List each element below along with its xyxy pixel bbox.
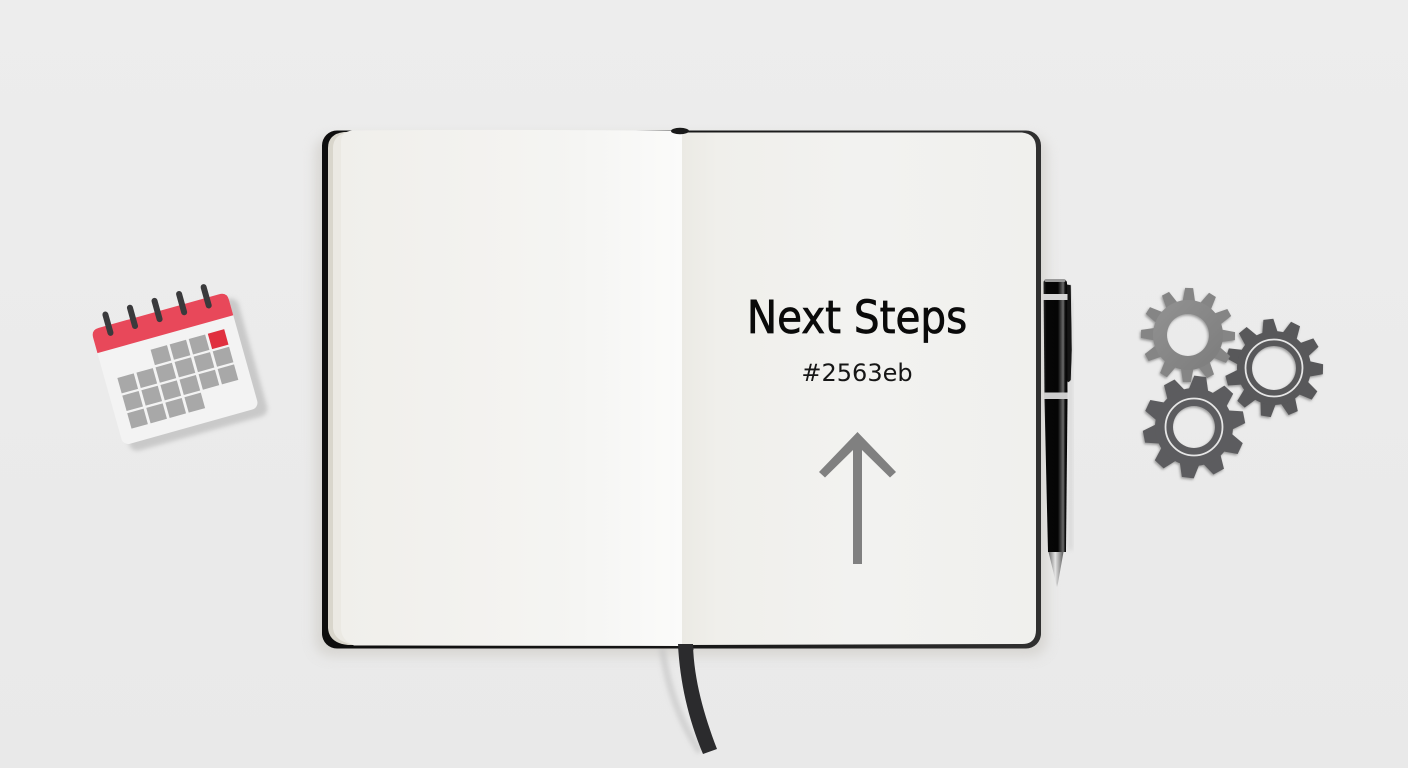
ribbon bookmark xyxy=(662,645,717,754)
ribbon top xyxy=(678,644,694,650)
pen xyxy=(1044,279,1073,587)
left page stack inner edge xyxy=(333,132,362,644)
subtitle colour code: #2563eb xyxy=(801,359,913,387)
spine clip xyxy=(671,128,689,134)
right page xyxy=(682,132,1036,645)
left page stack edges xyxy=(328,132,360,645)
icon: calendar xyxy=(88,279,269,454)
arrow: up xyxy=(819,432,896,564)
icon: gears xyxy=(1141,288,1323,479)
pen bands xyxy=(1044,294,1068,300)
calendar header xyxy=(91,292,233,353)
gear top xyxy=(1141,288,1235,382)
notebook shadow xyxy=(315,136,1047,656)
calendar page xyxy=(91,292,259,446)
pen cap top xyxy=(1044,279,1066,282)
title: Next Steps xyxy=(747,291,967,344)
notebook xyxy=(315,128,1047,754)
gear right xyxy=(1225,318,1323,418)
notebook cover xyxy=(322,130,1041,648)
pen tip xyxy=(1048,552,1064,587)
calendar date grid xyxy=(112,329,243,429)
pen clip xyxy=(1065,284,1072,382)
calendar shadow xyxy=(99,297,269,453)
calendar rings xyxy=(105,287,209,333)
pen shadow xyxy=(1068,300,1073,550)
pen barrel xyxy=(1044,279,1068,552)
left page xyxy=(341,130,682,646)
gear bottom xyxy=(1142,375,1246,479)
